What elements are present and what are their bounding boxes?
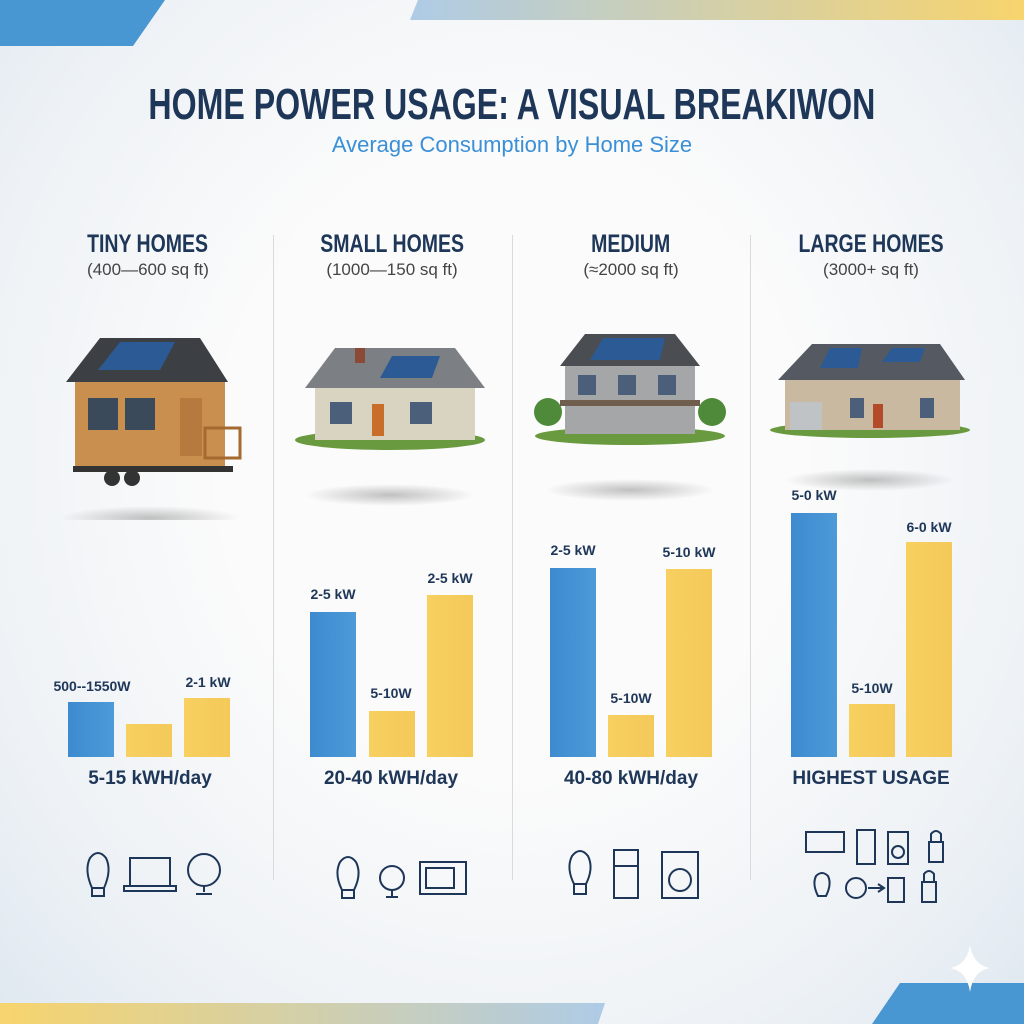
text: HIGHEST USAGE (792, 768, 950, 789)
text: 5-10W (610, 690, 652, 706)
bar chart: large (791, 487, 952, 757)
house: tiny (60, 338, 240, 530)
text: 500--1550W (53, 678, 131, 694)
text: 5-10W (370, 685, 412, 701)
text: 5-10 kW (663, 544, 715, 560)
house: medium (534, 334, 726, 501)
panel: small homes: SMALL HOMES (320, 230, 464, 258)
bar chart: small (310, 570, 473, 757)
text: 2-5 kW (310, 586, 356, 602)
text: 2-5 kW (550, 542, 596, 558)
text: 2-5 kW (427, 570, 473, 586)
text: 5-10W (851, 680, 893, 696)
panel: tiny homes (87, 230, 209, 279)
text: 20-40 kWH/day (324, 768, 458, 789)
panel: medium: (≈2000 sq ft) (583, 260, 679, 279)
icon: large set (806, 830, 943, 902)
panel: small homes: (1000—150 sq ft) (326, 260, 458, 279)
panel: medium (583, 230, 679, 279)
panel: large: LARGE HOMES (798, 230, 944, 258)
icons: appliances (86, 829, 944, 903)
icon: medium set (569, 850, 698, 898)
panel: tiny homes: TINY HOMES (88, 230, 208, 258)
text: 6-0 kW (906, 519, 952, 535)
panel: tiny homes: (400—600 sq ft) (87, 260, 209, 279)
icon: small set (337, 857, 466, 898)
panel: medium: MEDIUM (591, 230, 671, 258)
text: 2-1 kW (185, 674, 231, 690)
text: 5-0 kW (791, 487, 837, 503)
panel: large (798, 230, 944, 279)
text: 40-80 kWH/day (564, 768, 698, 789)
house illustrations (66, 334, 970, 520)
panel: small homes (320, 230, 464, 279)
subtitle: Average Consumption by Home Size (332, 132, 692, 157)
title: HOME POWER USAGE: A VISUAL BREAKIWON (149, 80, 875, 129)
house: large (770, 344, 970, 491)
bar chart: medium (550, 542, 716, 757)
icon: tiny set (87, 853, 220, 896)
daily usage labels: 5-15 kWH/day (88, 768, 212, 789)
house: small (295, 348, 485, 506)
bar chart: tiny (53, 674, 231, 757)
panel: large: (3000+ sq ft) (823, 260, 919, 279)
